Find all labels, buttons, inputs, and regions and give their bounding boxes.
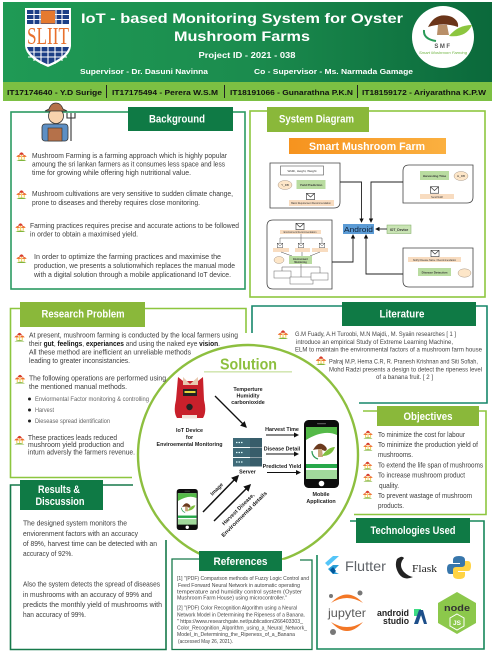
background text: Mushroom Farming is a farming approach which is highly popular <box>32 151 227 160</box>
literature text: of a banana fruit. [ 2 ] <box>376 374 433 381</box>
heading: references: References <box>214 556 268 568</box>
background text: time for growing while offering high nutritional value. <box>32 168 191 177</box>
results text: of 89%, harvest time can be detected with an <box>23 539 157 548</box>
background text: production, we presents a solutionwhich replaces the manual mode <box>34 261 235 270</box>
references text: Color_Recognition_Algorithm_using_a_Neural_Network_ <box>177 626 307 632</box>
background text <box>15 151 239 279</box>
results text: han accuracy of 99%. <box>23 610 86 619</box>
panel: references <box>172 551 312 650</box>
research problem text continued: leading to greater inconsistancies. <box>29 356 130 365</box>
panel: literature <box>252 302 487 403</box>
objectives list: To minimize the cost for labour <box>378 430 465 439</box>
label: iot device: for <box>186 435 194 441</box>
label: mobile application <box>306 492 336 505</box>
label: iot device: Enviroemental Monitoring <box>156 442 222 448</box>
solution heading: Solution <box>220 356 277 374</box>
team members strip: IT17174640 - Y.D Surige <box>7 88 102 97</box>
logo: android studio: android <box>377 608 409 619</box>
research problem text continued: All these method are inefficient an unreliable methods <box>29 348 191 356</box>
team members strip: IT18191066 - Gunarathna P.K.N <box>230 88 353 97</box>
literature text: ELM to maintain the environmental factors of a mushroom farm house <box>295 346 483 354</box>
logo: node js: node <box>444 603 470 613</box>
output: harvest time: Harvest Time <box>265 427 299 433</box>
panel: objectives <box>354 406 486 514</box>
label: mobile application: Application <box>306 499 336 505</box>
label: sensor data: carbonioxide <box>231 400 265 406</box>
literature text <box>278 330 483 381</box>
results text <box>23 518 162 619</box>
literature text: introduce an empirical Study of Extreme Learning Machine, <box>296 339 453 346</box>
icon: iot device <box>175 377 205 418</box>
panel: research problem <box>10 302 246 478</box>
heading: literature <box>342 302 476 326</box>
research problem text: At present, mushroom farming is conducted by the local farmers using <box>29 330 238 340</box>
banner: smart mushroom farm <box>289 138 446 154</box>
solution circle <box>138 345 358 565</box>
results text: enviorenment factors with an accuracy <box>23 529 138 538</box>
supervisor: Supervisor - Dr. Dasuni Navinna <box>80 67 209 76</box>
arrow: harvest disease to server <box>214 485 250 521</box>
main title <box>81 11 404 45</box>
SMF logo <box>412 6 474 68</box>
references text: [2] "(PDF) Color Recognition Algorithm using a Neural <box>177 606 297 612</box>
literature text: Mohd Radzi presents a design to detect the ripeness level <box>329 366 482 374</box>
diagram: environment monitoring block <box>267 220 332 289</box>
iot device node: IOT_Device <box>390 228 408 232</box>
objectives list: mushrooms. <box>378 450 413 459</box>
objectives list: To prevent wastage of mushroom <box>378 491 472 500</box>
heading: technologies used <box>356 518 470 543</box>
references text: Mushroom Farm House) using microcontroller." <box>177 596 287 602</box>
heading: results and discussion: Results & <box>38 484 80 496</box>
diagram: harvesting time block: H_DB <box>457 174 465 178</box>
results text: The designed system monitors the <box>23 518 127 528</box>
results text: Also the system detects the spread of diseases <box>23 580 160 588</box>
icon: farmer <box>42 103 75 141</box>
iot device node <box>387 225 411 234</box>
logo: node js: JS <box>453 620 462 627</box>
literature text: G.M Fuady, A.H Turoobi, M.N Majdi,, M. Syaiin researches [ 1 ] <box>295 331 456 338</box>
diagram arrows <box>332 182 403 274</box>
logo: jupyter: jupyter <box>327 606 366 620</box>
diagram: harvesting time block: Send Notifi <box>431 196 443 199</box>
arrow: image to server <box>203 476 238 512</box>
heading: literature: Literature <box>380 308 424 320</box>
diagram: yield prediction block: Y_DB <box>281 183 289 187</box>
heading: system diagram <box>267 107 369 132</box>
diagram: environment monitoring block: Environment <box>293 258 308 261</box>
co-supervisor: Co - Supervisor - Ms. Narmada Gamage <box>254 67 413 76</box>
label: mobile application: Mobile <box>312 492 330 498</box>
SLIIT shield logo: SLIIT <box>27 24 69 50</box>
diagram: yield prediction block: Width, Height, Weight <box>288 169 317 173</box>
background text: prone to diseases and thereby requires close monitoring. <box>32 198 200 207</box>
objectives list: To increase mushroom product <box>378 470 465 480</box>
references text: Model_in_Determining_the_Ripeness_of_a_Banana <box>177 632 295 638</box>
panel: technologies used <box>317 518 484 649</box>
research problem text: their gut, feelings, experiances and using the naked eye vision. <box>29 339 220 348</box>
background text: with a digital solution through a mobile applicationand IoT device. <box>33 270 231 279</box>
label: sensor data: Humidity <box>236 394 260 400</box>
android node: Android <box>344 225 373 234</box>
diagram: environment monitoring block: Monitoring <box>294 261 307 264</box>
label: server: Server <box>239 470 257 476</box>
references text: [1] "(PDF) Comparison methods of Fuzzy Logic Control and <box>177 576 309 582</box>
icon: mobile application phone <box>304 420 339 488</box>
heading: background <box>128 107 233 131</box>
results text: in mushrooms with an accuracy of 99% and <box>23 590 152 599</box>
team members strip <box>3 82 492 101</box>
diagram: disease detection block: Notify Disease Name / Recommendation <box>413 259 457 262</box>
results text: predicts the monthly yield of mushrooms with <box>23 600 162 609</box>
logo: node js <box>438 592 476 634</box>
research problem text <box>14 330 238 348</box>
heading: objectives: Objectives <box>404 411 452 423</box>
research problem text continued: These practices leads reduced <box>28 433 117 442</box>
research problem text continued: mushroom yield production and <box>28 440 124 449</box>
results text: accuracy of 92%. <box>23 549 73 558</box>
panel: results and discussion <box>10 480 166 650</box>
diagram: yield prediction block <box>270 163 340 208</box>
SMF logo: Smart Mushroom Farming <box>419 51 468 55</box>
label: iot device: IoT Device <box>176 428 203 434</box>
objectives list: quality. <box>379 481 399 490</box>
research problem text continued: inturn adversly the farmers revenue. <box>28 448 135 456</box>
research problem text continued <box>14 348 191 456</box>
SLIIT shield logo <box>25 8 71 67</box>
research problem text continued: Harvest <box>35 407 54 414</box>
diagram: harvesting time block <box>403 165 473 203</box>
label: iot device <box>156 428 222 448</box>
team members strip: IT18159172 - Ariyarathna K.P.W <box>362 88 487 97</box>
heading: technologies used: Technologies Used <box>370 525 456 537</box>
heading: system diagram: System Diagram <box>279 114 354 126</box>
research problem text continued: the mentioned manual methods. <box>29 382 127 391</box>
banner: smart mushroom farm: Smart Mushroom Farm <box>309 141 425 153</box>
label: harvest disease and environmental details: Harvest Disease, <box>221 492 256 527</box>
logo: android studio <box>377 608 427 627</box>
research problem text continued: The following operations are performed using <box>29 374 166 382</box>
research problem text continued: Diesease spread identification <box>35 418 110 425</box>
diagram: harvesting time block: Harvesting Time <box>423 174 446 178</box>
objectives list <box>363 430 483 510</box>
logo: flutter <box>325 556 386 574</box>
background text: Mushroom cultivations are very sensitive to sudden climate change, <box>32 189 233 198</box>
output: disease detail: Disease Detail <box>264 446 301 452</box>
heading: results and discussion <box>20 480 103 510</box>
SMF logo: SMF <box>434 44 452 50</box>
background text: amoung the sri lankan farmers as it consumes less space and less <box>32 160 225 168</box>
logo: python <box>447 556 471 579</box>
background text: Farming practices requires precise and accurate actions to be followed <box>30 221 239 230</box>
references text: Feed Forward Neural Network in automatic operating <box>178 583 300 589</box>
research problem text continued: Enviormental Factor monitoring & controlling <box>35 396 149 403</box>
main title: IoT - based Monitoring System for Oyster <box>81 11 404 27</box>
icon: server <box>233 438 262 466</box>
arrow: sensor data to server <box>215 396 246 427</box>
icon: input phone <box>177 489 198 530</box>
logo: android studio: studio <box>383 616 409 627</box>
main title: Mushroom Farms <box>174 29 310 45</box>
diagram: yield prediction block: Yield Prediction <box>300 183 322 187</box>
panel: background <box>11 103 245 289</box>
references text <box>177 576 309 645</box>
diagram: disease detection block <box>403 248 473 287</box>
logo: flask: Flask <box>412 563 438 575</box>
project id: Project ID - 2021 - 038 <box>198 51 296 60</box>
logo: jupyter <box>327 590 366 635</box>
diagram: yield prediction block: Basic Requirement Recommendation <box>291 202 331 205</box>
background text: In order to optimize the farming practices and maximise the <box>34 252 221 261</box>
diagram: disease detection block: Disease Detection <box>422 270 448 274</box>
output: predicted yield: Predicted Yield <box>263 464 301 470</box>
label: sensor data: Temperture <box>233 387 263 393</box>
literature text: Palraj M.P, Hema C.R, R. Pranesh Krishnan and Siti Sofiah, <box>329 358 478 366</box>
label: image: Image <box>210 482 225 497</box>
label: sensor data <box>231 387 265 406</box>
diagram: environment monitoring block: Environment Recommendation <box>284 231 317 234</box>
logo: flask <box>396 557 438 578</box>
references text: Network Model in Determining the Ripeness of a Banana. <box>177 613 305 619</box>
heading: results and discussion: Discussion <box>36 496 85 508</box>
logo: flutter: Flutter <box>345 558 386 574</box>
objectives list: products. <box>378 501 404 510</box>
header banner <box>3 2 492 82</box>
references text: (accessed May 26, 2021). <box>178 639 233 645</box>
references text: " https://www.researchgate.net/publication/266403303_ <box>177 619 303 625</box>
heading: background: Background <box>149 114 205 126</box>
heading: research problem <box>20 302 145 327</box>
label: harvest disease and environmental details: Environmental details <box>221 491 269 539</box>
background text: in order to obtain a maximised yield. <box>30 230 138 238</box>
team members strip: IT17175494 - Perera W.S.M <box>112 88 218 97</box>
references text: temperature and humidity control system (Oyster <box>177 590 302 596</box>
objectives list: To minimize the production yield of <box>378 440 479 449</box>
heading: research problem: Research Problem <box>42 308 125 320</box>
panel: system diagram <box>250 107 485 297</box>
